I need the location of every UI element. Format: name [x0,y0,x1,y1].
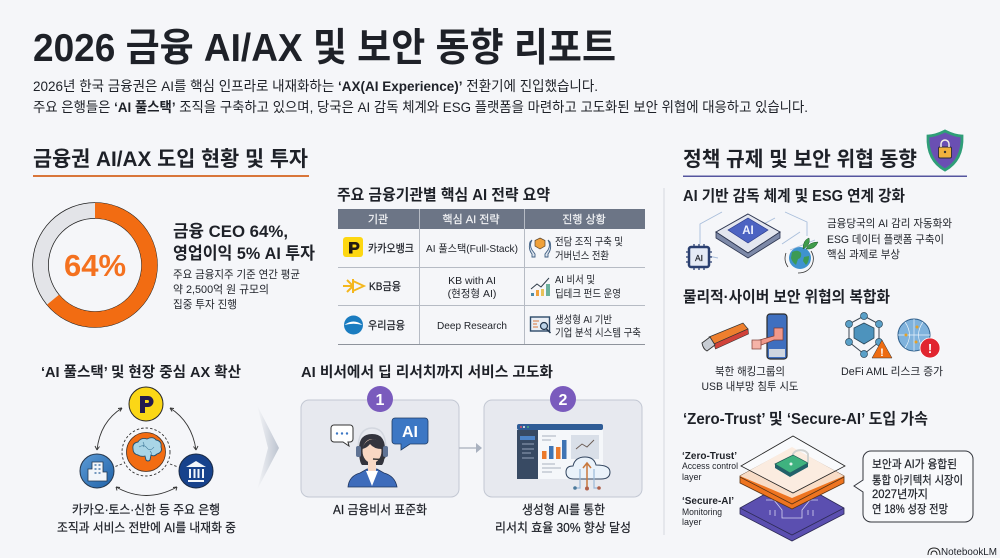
caption: DeFi AML: DeFi AML 리스크 증가 [841,365,943,378]
icon: DeFi network with warning: ! [880,347,884,359]
icon: report with magnifier [530,317,550,333]
caption: USB infiltration: 북한 해킹그룹의 [715,364,785,378]
caption: USB infiltration: USB 내부망 침투 시도 [702,380,798,393]
icon: AI chip with ESG globe [686,212,818,273]
diagram: AI full-stack cycle [80,387,213,496]
icon: green lock [775,450,808,477]
labels: Secure-AI layer: ‘Secure-AI’ [682,496,734,507]
strategy table: AI 풀스택(Full-Stack) [426,243,518,255]
caption: card 2: 리서치 효율 30% 향상 달성 [495,521,631,535]
caption: full-stack banks: 조직과 서비스 전반에 AI를 내재화 중 [57,521,236,535]
strategy table: 거버넌스 전환 [555,250,609,262]
icon: security shield [928,131,962,170]
node: yellow P logo [129,387,163,421]
strategy table: 진행 상황 [562,213,606,226]
caption: USB infiltration [702,364,798,393]
stat text: CEO investment [173,222,315,311]
donut chart: 64% [40,210,150,320]
card 1: AI financial assistant: 1 [376,392,385,409]
callout: market forecast [854,451,973,522]
icon: DeFi network with warning [846,312,892,359]
card 2: deep research dashboard: 2 [559,392,568,409]
icon: AI chip with ESG globe: AI [742,225,754,237]
icon: dashboard window [517,424,610,490]
caption: card 2 [495,503,631,535]
icon: globe with alert [898,319,940,358]
text: AI supervision description [827,217,952,261]
callout: market forecast: 보안과 AI가 융합된 [872,458,957,471]
node: office building [80,454,114,488]
strategy table: AI 비서 및 [555,274,595,286]
layer: Secure-AI [740,479,844,541]
intro text: 2026년 한국 금융권은 AI를 핵심 인프라로 내재화하는 ‘AX(AI Experience)’ 전환기에 진입했습니다. [33,78,598,94]
strategy table: KB금융 [369,280,401,293]
icon: AI speech bubble [392,418,428,450]
text: AI supervision description: 금융당국의 AI 감리 자동화와 [827,217,952,230]
strategy table: 핵심 AI 전략 [442,213,500,226]
layer: transparent top [741,436,845,493]
intro text: 주요 은행들은 ‘AI 풀스택’ 조직을 구축하고 있으며, 당국은 AI 감독 체계와 ESG 플랫폼을 마련하고 고도화된 보안 위협에 대응하고 있습니다. [33,99,808,115]
heading: AI full-stack diffusion: ‘AI 풀스택’ 및 현장 중심 AX 확산 [41,364,241,381]
labels: Secure-AI layer [682,496,734,527]
icon: globe with alert: ! [928,341,932,356]
node: bank [179,454,213,488]
diagram: security layers [740,436,845,541]
strategy table: 딥테크 펀드 운영 [555,288,621,300]
icon: AI chip with ESG globe: AI [695,253,703,263]
caption: full-stack banks: 카카오·토스·신한 등 주요 은행 [72,502,220,517]
arrow: large chevron [257,405,279,490]
callout: market forecast: 2027년까지 [872,488,928,501]
stat text: CEO investment: 주요 금융지주 기준 연간 평균 [173,268,300,281]
strategy table: 전담 조직 구축 및 [555,236,623,248]
labels: Zero-Trust layer: layer [682,472,702,482]
icon: chat bubble [331,425,353,446]
text: AI supervision description: 핵심 과제로 부상 [827,248,900,261]
table heading: 주요 금융기관별 핵심 AI 전략 요약 [337,186,550,204]
card 2: deep research dashboard [484,386,642,497]
strategy table: 카카오뱅크 [368,242,414,255]
card 1: AI financial assistant [301,386,459,497]
icon: hands holding cube [529,238,551,257]
heading: physical and cyber threats: 물리적·사이버 보안 위협의 복합화 [683,288,890,306]
stat text: CEO investment: 금융 CEO 64%, [173,222,288,241]
heading: Zero-Trust and Secure-AI: ‘Zero-Trust’ 및 ‘Secure-AI’ 도입 가속 [683,410,928,428]
arrow: step 1 to step 2 [459,443,482,453]
strategy table: 우리금융 [368,319,405,332]
divider [663,188,665,535]
labels: Secure-AI layer: Monitoring [682,507,722,517]
panel: AI/AX adoption heading: 금융권 AI/AX 도입 현황 및 투자 [33,148,308,171]
heading: AI supervision: AI 기반 감독 체계 및 ESG 연계 강화 [683,187,905,205]
callout: market forecast: 통합 아키텍처 시장이 [872,474,963,487]
logo: KB [343,279,364,293]
icon: growth chart [531,278,550,296]
strategy table [338,209,645,344]
logo: NotebookLM: NotebookLM [941,547,997,558]
logo: Woori [344,316,363,334]
caption: full-stack banks [57,502,236,535]
panel: policy and security heading: 정책 규제 및 보안 위협 동향 [683,148,917,171]
layer: Zero-Trust base [740,447,844,509]
text: AI supervision description: ESG 데이터 플랫폼 구축이 [827,233,944,246]
strategy table: (현정형 AI) [448,288,496,300]
caption: card 1: AI 금융비서 표준화 [333,503,427,517]
icon: USB and phone [702,314,787,359]
labels: Secure-AI layer: layer [682,517,702,527]
stat text: CEO investment: 영업이익 5% AI 투자 [173,244,315,263]
title: 2026 금융 AI/AX 및 보안 동향 리포트 [33,27,616,70]
heading: AI service evolution: AI 비서에서 딥 리서치까지 서비스 고도화 [301,364,553,381]
logo: Kakao Bank [343,237,363,257]
stat text: CEO investment: 약 2,500억 원 규모의 [173,282,269,296]
labels: Zero-Trust layer: Access control [682,461,738,471]
labels: Zero-Trust layer: ‘Zero-Trust’ [682,451,737,462]
strategy table: 기업 분석 시스템 구축 [555,326,641,339]
strategy table: 기관 [368,213,388,226]
strategy table: KB with AI [448,275,496,287]
caption: card 2: 생성형 AI를 통한 [522,503,605,517]
callout: market forecast: 연 18% 성장 전망 [872,503,948,516]
icon: AI speech bubble: AI [402,424,418,441]
strategy table: Deep Research [437,320,507,332]
labels: Zero-Trust layer [682,451,738,482]
node: AI brain [126,432,166,472]
stat text: CEO investment: 집중 투자 진행 [173,298,237,311]
intro text [33,78,808,115]
icon: headset agent [348,428,397,487]
strategy table: 생성형 AI 기반 [555,314,612,326]
donut chart: 64%: 64% [64,248,126,283]
